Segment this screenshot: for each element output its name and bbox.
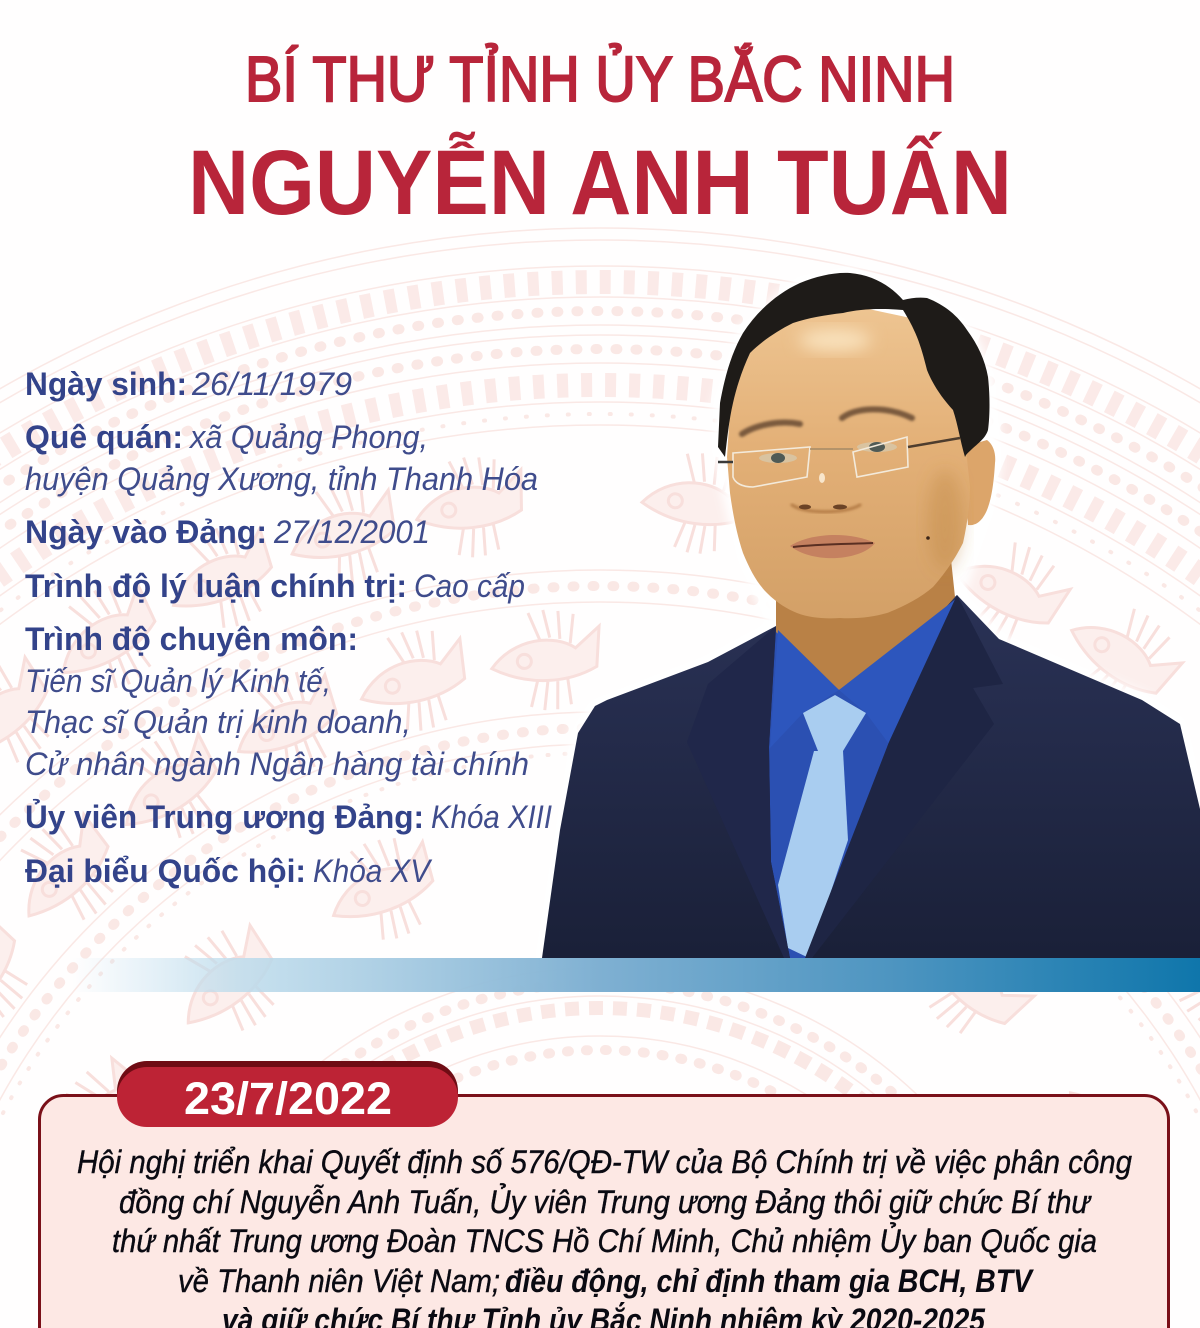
- shirt: [769, 600, 960, 958]
- face: [727, 305, 970, 618]
- background: stylised birds: [0, 448, 1200, 1211]
- professional qualifications: Cử nhân ngành Ngân hàng tài chính: [25, 746, 529, 782]
- right lapel: [805, 595, 1003, 958]
- mole: [926, 536, 930, 540]
- badge body: [117, 1067, 458, 1127]
- blue gradient band: [0, 958, 1200, 992]
- panel body text: đồng chí Nguyễn Anh Tuấn, Ủy viên Trung ương Đảng thôi giữ chức Bí thư: [119, 1184, 1092, 1220]
- forehead highlight: [799, 329, 871, 351]
- party admission date: Ngày vào Đảng:: [25, 514, 267, 550]
- hometown: [25, 419, 538, 497]
- tie: [778, 695, 866, 958]
- panel body text: điều động, chỉ định tham gia BCH, BTV: [505, 1263, 1034, 1299]
- hometown: Quê quán:: [25, 419, 183, 455]
- title line 2: name: NGUYỄN ANH TUẤN: [188, 130, 1012, 234]
- left lapel: [718, 626, 790, 958]
- collar right: [839, 598, 957, 744]
- title: [188, 42, 1012, 234]
- national assembly deputy: Đại biểu Quốc hội:: [25, 853, 306, 889]
- nose: [792, 473, 860, 512]
- party admission date: [25, 514, 430, 550]
- cheek shadow: [927, 470, 963, 570]
- date badge: [117, 1061, 458, 1127]
- panel body text: [77, 1144, 1132, 1328]
- title line 1: BÍ THƯ TỈNH ỦY BẮC NINH: [245, 42, 955, 115]
- hometown: xã Quảng Phong,: [188, 419, 428, 455]
- suit jacket: [542, 595, 1200, 958]
- eyes: [759, 442, 897, 463]
- collar left: [770, 630, 839, 748]
- panel body text: Hội nghị triển khai Quyết định số 576/QĐ-TW của Bộ Chính trị về việc phân công: [77, 1144, 1132, 1180]
- professional qualifications: Trình độ chuyên môn:: [25, 621, 358, 657]
- panel box: [40, 1096, 1168, 1328]
- panel body text: thứ nhất Trung ương Đoàn TNCS Hồ Chí Minh, Chủ nhiệm Ủy ban Quốc gia: [112, 1223, 1097, 1259]
- portrait halo: [548, 265, 1152, 827]
- national assembly deputy: Khóa XV: [313, 853, 432, 889]
- hometown: huyện Quảng Xương, tỉnh Thanh Hóa: [25, 461, 538, 497]
- central committee membership: Khóa XIII: [431, 799, 552, 835]
- date of birth: Ngày sinh:: [25, 366, 187, 402]
- portrait illustration: [542, 273, 1200, 958]
- political theory level: Trình độ lý luận chính trị:: [25, 568, 407, 604]
- professional qualifications: [25, 621, 529, 782]
- date of birth: 26/11/1979: [191, 366, 352, 402]
- political theory level: Cao cấp: [414, 568, 525, 604]
- glasses: [718, 437, 960, 487]
- professional qualifications: Thạc sĩ Quản trị kinh doanh,: [25, 704, 411, 740]
- neck: [776, 550, 955, 690]
- hair: [718, 273, 990, 457]
- professional qualifications: Tiến sĩ Quản lý Kinh tế,: [25, 663, 331, 699]
- event panel: [40, 1061, 1168, 1328]
- badge shadow top: [117, 1061, 458, 1123]
- national assembly deputy: [25, 853, 432, 889]
- eyebrows: [742, 409, 912, 434]
- ear: [963, 440, 995, 525]
- central committee membership: Ủy viên Trung ương Đảng:: [25, 799, 424, 835]
- party admission date: 27/12/2001: [273, 514, 430, 550]
- mouth: [790, 535, 875, 558]
- date of birth: [25, 366, 352, 402]
- profile information list: [25, 366, 552, 889]
- date: 23/7/2022: [184, 1073, 392, 1124]
- panel body text: về Thanh niên Việt Nam;: [178, 1263, 500, 1299]
